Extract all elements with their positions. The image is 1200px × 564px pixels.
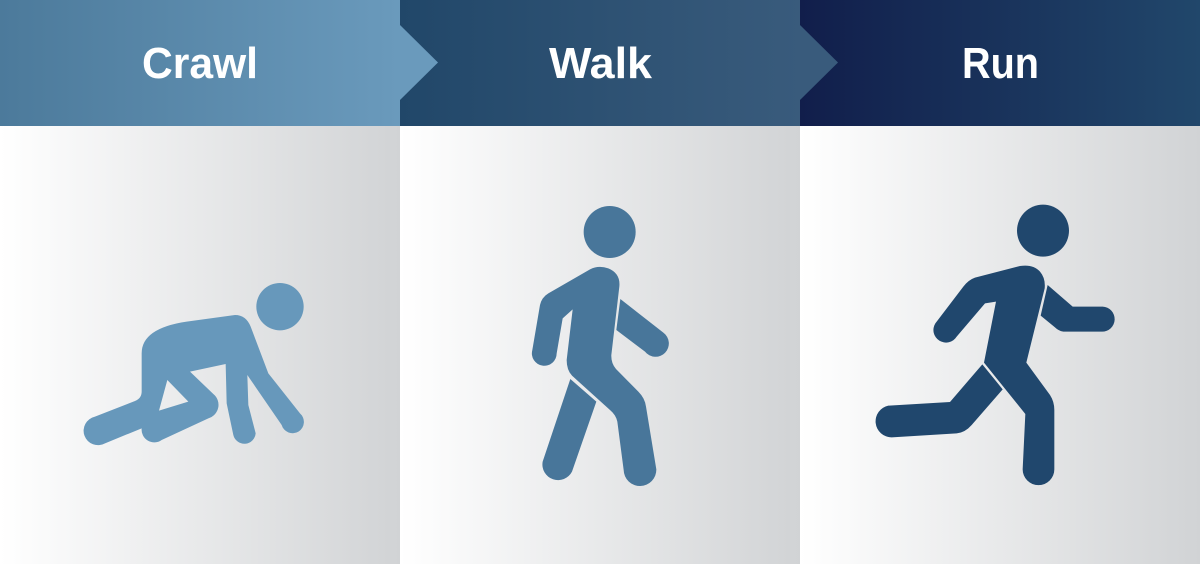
panel: walk [400, 126, 800, 564]
heading: run: Run [962, 39, 1039, 88]
arrow: walk to run [800, 25, 838, 100]
panel: crawl [0, 126, 400, 564]
heading: crawl: Crawl [142, 39, 258, 88]
heading: walk: Walk [549, 39, 653, 88]
arrow: crawl to walk [400, 25, 438, 100]
icon: walking figure [532, 206, 669, 486]
panel: run [800, 126, 1200, 564]
header: run [800, 0, 1200, 126]
icon: crawling figure [84, 283, 304, 445]
header: crawl [0, 0, 400, 126]
header: walk [400, 0, 800, 126]
icon: running figure [876, 205, 1115, 485]
